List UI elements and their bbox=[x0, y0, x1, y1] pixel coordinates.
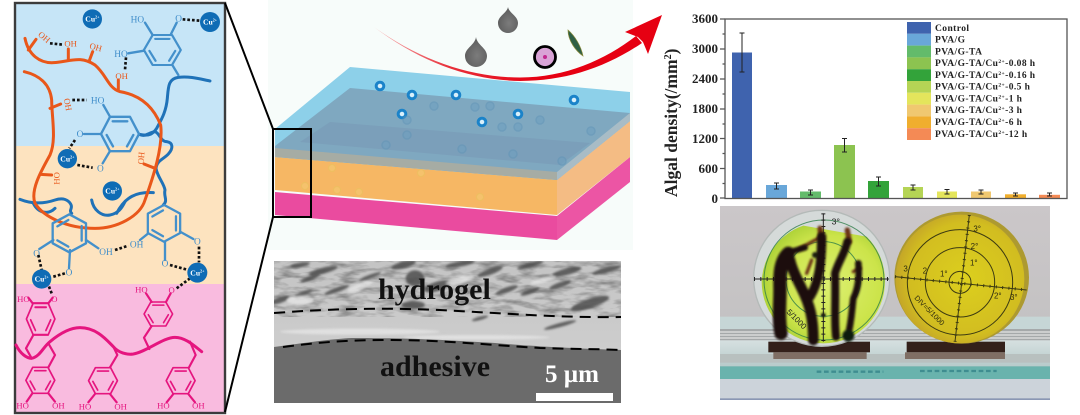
detail box marker bbox=[225, 3, 311, 412]
orange hydroxyl labels: OH bbox=[88, 41, 103, 54]
adhesive region bbox=[274, 338, 621, 403]
dashed interface lines bbox=[274, 309, 621, 350]
legend: PVA/G bbox=[935, 36, 966, 46]
icon: cell organism bbox=[534, 46, 556, 68]
copper ion labels: Cu bbox=[190, 268, 200, 277]
photo background and glass base bbox=[720, 206, 1050, 400]
copper ion labels: 2+ bbox=[44, 275, 49, 280]
legend: -0.16 h bbox=[1005, 71, 1036, 81]
legend: PVA/G-TA/Cu bbox=[935, 106, 998, 116]
blue oxygen and hydroxyl labels: O bbox=[77, 130, 84, 140]
pink hydroxyl labels: O bbox=[51, 294, 57, 304]
legend: PVA/G-TA/Cu bbox=[935, 94, 998, 104]
scale bar bbox=[536, 393, 613, 401]
axes and tick marks bbox=[720, 19, 1067, 198]
copper ion labels: Cu bbox=[105, 187, 115, 196]
blue oxygen and hydroxyl labels: O bbox=[97, 164, 104, 174]
pink hydroxyl labels: HO bbox=[16, 401, 29, 411]
pink hydroxyl labels: HO bbox=[17, 294, 30, 304]
icon: diatom leaf bbox=[568, 30, 583, 56]
blue oxygen and hydroxyl labels bbox=[33, 14, 201, 278]
legend: 2+ bbox=[998, 118, 1005, 124]
orange hydroxyl labels: OH bbox=[36, 29, 52, 45]
left gauge with oil streaks: 3° bbox=[832, 216, 840, 226]
y axis tick labels: 3000 bbox=[692, 41, 718, 56]
pink polymer chain with catechol groups bbox=[16, 293, 202, 402]
legend: 2+ bbox=[998, 59, 1005, 65]
orange hydroxyl labels bbox=[36, 29, 147, 185]
y axis tick labels: 600 bbox=[698, 161, 718, 176]
faint embedded dots bbox=[382, 102, 595, 165]
right gauge clean: 3° bbox=[973, 225, 981, 234]
blue oxygen and hydroxyl labels: O bbox=[175, 14, 182, 24]
blue oxygen and hydroxyl labels: HO bbox=[114, 50, 128, 60]
legend: Control bbox=[935, 24, 969, 34]
copper ion labels: 2+ bbox=[70, 154, 75, 159]
light streaks bbox=[280, 273, 557, 340]
pink hydroxyl labels: OH bbox=[52, 401, 65, 411]
icon: oil droplets bbox=[465, 7, 518, 67]
legend: -0.5 h bbox=[1005, 82, 1031, 92]
pink hydroxyl labels: HO bbox=[79, 401, 91, 411]
left gauge with oil streaks: 5/1000 bbox=[785, 307, 809, 331]
copper ion labels: 2+ bbox=[115, 187, 120, 192]
right gauge clean: 2° bbox=[971, 242, 978, 251]
y axis tick labels: 1800 bbox=[692, 101, 718, 116]
pink hydroxyl labels: O bbox=[169, 285, 175, 295]
legend: 2+ bbox=[998, 106, 1005, 112]
y axis tick labels: 0 bbox=[712, 191, 718, 206]
legend: PVA/G-TA/Cu bbox=[935, 118, 998, 128]
error bars bbox=[740, 33, 1052, 196]
right gauge clean: 1° bbox=[940, 269, 948, 278]
legend: PVA/G-TA/Cu bbox=[935, 71, 998, 81]
y axis tick labels: 3600 bbox=[692, 11, 718, 26]
left gauge with oil streaks bbox=[754, 210, 890, 359]
bright copper ion dots bbox=[376, 82, 578, 126]
right gauge clean: 3 bbox=[903, 265, 908, 274]
panel: 3D layered coating bbox=[225, 0, 662, 412]
blue oxygen and hydroxyl labels: OH bbox=[130, 240, 144, 250]
right gauge clean: 2° bbox=[994, 291, 1002, 300]
pink adhesive layer bbox=[275, 157, 630, 240]
blue oxygen and hydroxyl labels: HO bbox=[91, 97, 105, 107]
copper ion labels bbox=[35, 15, 218, 284]
legend: 2+ bbox=[998, 130, 1005, 136]
copper ion labels: Cu bbox=[35, 275, 44, 284]
blue oxygen and hydroxyl labels: O bbox=[194, 238, 201, 248]
pink hydroxyl labels: OH bbox=[192, 401, 205, 411]
pink hydroxyl labels: OH bbox=[114, 401, 127, 411]
y axis title: Algal density(/mm bbox=[661, 59, 681, 197]
blue top layer bbox=[275, 67, 630, 180]
right gauge clean bbox=[894, 212, 1029, 359]
pink hydroxyl labels bbox=[16, 285, 205, 411]
orange polymer chains bbox=[24, 38, 161, 228]
legend: -0.08 h bbox=[1005, 59, 1036, 69]
legend: PVA/G-TA/Cu bbox=[935, 82, 998, 92]
copper ion labels: Cu bbox=[85, 15, 95, 24]
orange hydroxyl labels: OH bbox=[62, 97, 74, 112]
orange hydroxyl labels: OH bbox=[52, 172, 62, 185]
arrow: red repelling curve bbox=[374, 15, 662, 81]
legend: -1 h bbox=[1005, 94, 1023, 104]
copper ion labels: Cu bbox=[60, 154, 70, 163]
legend: 2+ bbox=[998, 71, 1005, 77]
copper ion labels: 2+ bbox=[213, 18, 218, 23]
chart: algal density bar chart bbox=[661, 11, 1067, 206]
y axis tick labels: 2400 bbox=[692, 71, 718, 86]
copper ion labels: Cu bbox=[203, 18, 213, 27]
label: adhesive: adhesive bbox=[380, 350, 490, 383]
blue tannic acid rings bbox=[39, 23, 193, 268]
blue oxygen and hydroxyl labels: HO bbox=[131, 15, 144, 25]
blue oxygen and hydroxyl labels: O bbox=[33, 249, 40, 259]
panel: molecular structure schematic bbox=[15, 3, 225, 413]
y axis title: ) bbox=[661, 48, 681, 54]
legend: -6 h bbox=[1005, 118, 1023, 128]
blue oxygen and hydroxyl labels: O bbox=[162, 259, 169, 269]
orange hydroxyl labels: OH bbox=[64, 39, 77, 49]
y axis tick labels bbox=[692, 11, 718, 206]
coordination and hydrogen bonds bbox=[38, 19, 200, 293]
dark textured patches bbox=[270, 259, 622, 331]
legend: -12 h bbox=[1005, 130, 1028, 140]
legend: 2+ bbox=[998, 82, 1005, 88]
pink hydroxyl labels: HO bbox=[135, 285, 148, 295]
right gauge clean: 2 bbox=[923, 267, 928, 276]
photo: oil on coated and uncoated level gauges bbox=[720, 206, 1050, 400]
right gauge clean: DIV=5/1000 bbox=[913, 293, 946, 327]
legend bbox=[907, 22, 1036, 140]
copper ion labels: 2+ bbox=[95, 15, 100, 20]
pink hydroxyl labels: HO bbox=[157, 401, 170, 411]
blue polymer chains and tannic acid rings bbox=[20, 77, 210, 215]
right gauge clean: 3° bbox=[1010, 293, 1018, 302]
orange hydroxyl labels: OH bbox=[115, 71, 128, 81]
legend: PVA/G-TA/Cu bbox=[935, 59, 998, 69]
y axis title: 2 bbox=[663, 54, 674, 59]
orange hydrogel layer bbox=[275, 121, 630, 215]
label: hydrogel: hydrogel bbox=[378, 273, 491, 306]
legend: -3 h bbox=[1005, 106, 1023, 116]
label: scale: 5 µm bbox=[545, 361, 599, 388]
y axis tick labels: 1200 bbox=[692, 131, 718, 146]
right gauge clean: 1° bbox=[970, 259, 978, 268]
legend: PVA/G-TA/Cu bbox=[935, 130, 998, 140]
legend: 2+ bbox=[998, 94, 1005, 100]
blue oxygen and hydroxyl labels: O bbox=[66, 268, 73, 278]
legend: PVA/G-TA bbox=[935, 48, 982, 58]
panel: SEM cross-section micrograph bbox=[270, 259, 622, 403]
copper ion labels: 2+ bbox=[200, 268, 205, 273]
orange hydroxyl labels: OH bbox=[135, 151, 147, 165]
blue oxygen and hydroxyl labels: OH bbox=[99, 248, 113, 258]
bars bbox=[732, 52, 1060, 198]
copper ions bbox=[32, 9, 220, 289]
